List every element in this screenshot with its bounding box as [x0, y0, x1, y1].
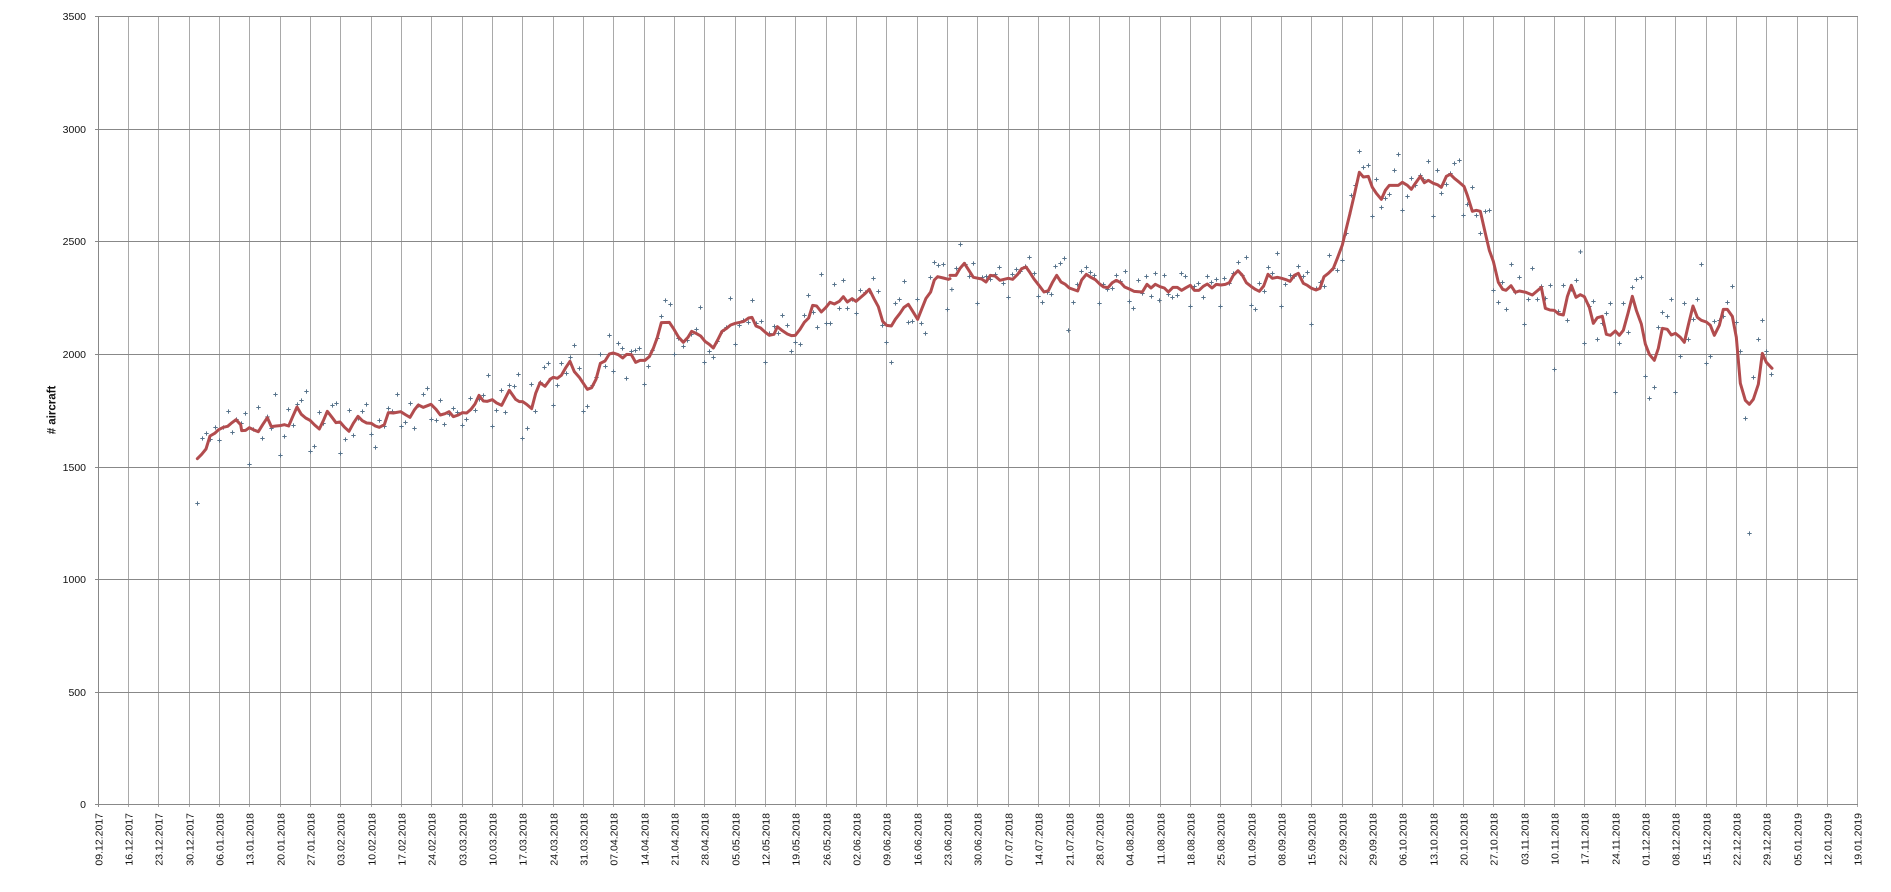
x axis date labels: 03.03.2018	[458, 813, 470, 866]
x axis date labels: 08.09.2018	[1276, 813, 1288, 866]
x axis date labels	[94, 813, 1864, 866]
x axis date labels: 24.02.2018	[426, 813, 438, 866]
x axis date labels: 19.01.2019	[1852, 813, 1864, 866]
x axis date labels: 31.03.2018	[578, 813, 590, 866]
y axis labels: 2000	[63, 349, 86, 361]
x axis date labels: 16.06.2018	[912, 813, 924, 866]
x axis date labels: 14.04.2018	[640, 813, 652, 866]
x axis date labels: 21.04.2018	[670, 813, 682, 866]
x axis date labels: 28.07.2018	[1094, 813, 1106, 866]
x axis date labels: 20.01.2018	[276, 813, 288, 866]
x axis date labels: 13.10.2018	[1428, 813, 1440, 866]
x axis date labels: 27.01.2018	[306, 813, 318, 866]
x axis date labels: 24.11.2018	[1610, 813, 1622, 865]
x axis date labels: 03.11.2018	[1520, 813, 1532, 865]
x axis date labels: 23.12.2017	[154, 813, 166, 866]
x axis date labels: 01.12.2018	[1640, 813, 1652, 866]
x axis date labels: 22.09.2018	[1338, 813, 1350, 866]
y axis labels: 500	[68, 687, 86, 699]
y axis labels: 2500	[63, 236, 86, 248]
y axis labels: 1500	[63, 462, 86, 474]
y axis labels: 3000	[63, 124, 86, 136]
x axis date labels: 05.05.2018	[730, 813, 742, 866]
x axis date labels: 01.09.2018	[1246, 813, 1258, 866]
x axis date labels: 07.07.2018	[1004, 813, 1016, 866]
x axis date labels: 15.12.2018	[1702, 813, 1714, 866]
y axis labels: 0	[80, 799, 86, 811]
x axis date labels: 28.04.2018	[700, 813, 712, 866]
x axis date labels: 26.05.2018	[822, 813, 834, 866]
x axis date labels: 21.07.2018	[1064, 813, 1076, 866]
x axis date labels: 02.06.2018	[852, 813, 864, 866]
y axis labels	[63, 11, 86, 811]
y axis line	[98, 16, 100, 807]
x axis date labels: 30.12.2017	[184, 813, 196, 866]
x axis date labels: 06.10.2018	[1398, 813, 1410, 866]
x axis date labels: 14.07.2018	[1034, 813, 1046, 866]
x axis date labels: 17.03.2018	[518, 813, 530, 866]
x axis date labels: 04.08.2018	[1124, 813, 1136, 866]
x axis date labels: 03.02.2018	[336, 813, 348, 866]
x axis date labels: 17.11.2018	[1580, 813, 1592, 865]
scatter: daily aircraft counts	[198, 152, 1772, 534]
x axis date labels: 27.10.2018	[1488, 813, 1500, 866]
x axis date labels: 18.08.2018	[1186, 813, 1198, 866]
x axis date labels: 30.06.2018	[972, 813, 984, 866]
x axis date labels: 19.05.2018	[790, 813, 802, 866]
x axis date labels: 08.12.2018	[1670, 813, 1682, 866]
x axis date labels: 17.02.2018	[396, 813, 408, 866]
x axis date labels: 13.01.2018	[244, 813, 256, 866]
x axis date labels: 24.03.2018	[548, 813, 560, 866]
x axis date labels: 12.05.2018	[760, 813, 772, 866]
trend line: moving average	[197, 172, 1772, 459]
x axis date labels: 29.12.2018	[1762, 813, 1774, 866]
x axis date labels: 29.09.2018	[1368, 813, 1380, 866]
x axis date labels: 10.03.2018	[488, 813, 500, 866]
y axis labels: 1000	[63, 574, 86, 586]
x axis date labels: 15.09.2018	[1306, 813, 1318, 866]
x axis date labels: 25.08.2018	[1216, 813, 1228, 866]
x axis date labels: 12.01.2019	[1822, 813, 1834, 866]
x axis date labels: 06.01.2018	[214, 813, 226, 866]
y axis labels: 3500	[63, 11, 86, 23]
x axis date labels: 11.08.2018	[1156, 813, 1168, 865]
x axis date labels: 23.06.2018	[942, 813, 954, 866]
x axis date labels: 22.12.2018	[1732, 813, 1744, 866]
x axis date labels: 07.04.2018	[608, 813, 620, 866]
x axis date labels: 10.11.2018	[1550, 813, 1562, 865]
x axis date labels: 09.06.2018	[882, 813, 894, 866]
x axis date labels: 09.12.2017	[94, 813, 106, 866]
x axis date labels: 10.02.2018	[366, 813, 378, 866]
x axis date labels: 16.12.2017	[124, 813, 136, 866]
x axis date labels: 20.10.2018	[1458, 813, 1470, 866]
y axis title: # aircraft	[46, 386, 58, 434]
x axis date labels: 05.01.2019	[1792, 813, 1804, 866]
